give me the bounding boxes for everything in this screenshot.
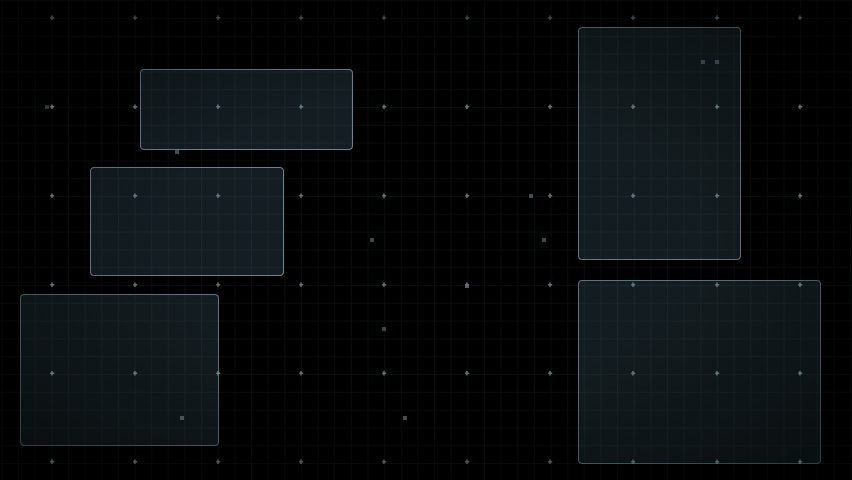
panel: middle left — [90, 168, 284, 276]
drifting square markers — [45, 60, 719, 420]
panel: bottom left — [20, 294, 218, 446]
panel: bottom right — [578, 280, 820, 464]
panel: top centre-left — [140, 70, 352, 150]
panel: top right tall — [578, 28, 740, 260]
